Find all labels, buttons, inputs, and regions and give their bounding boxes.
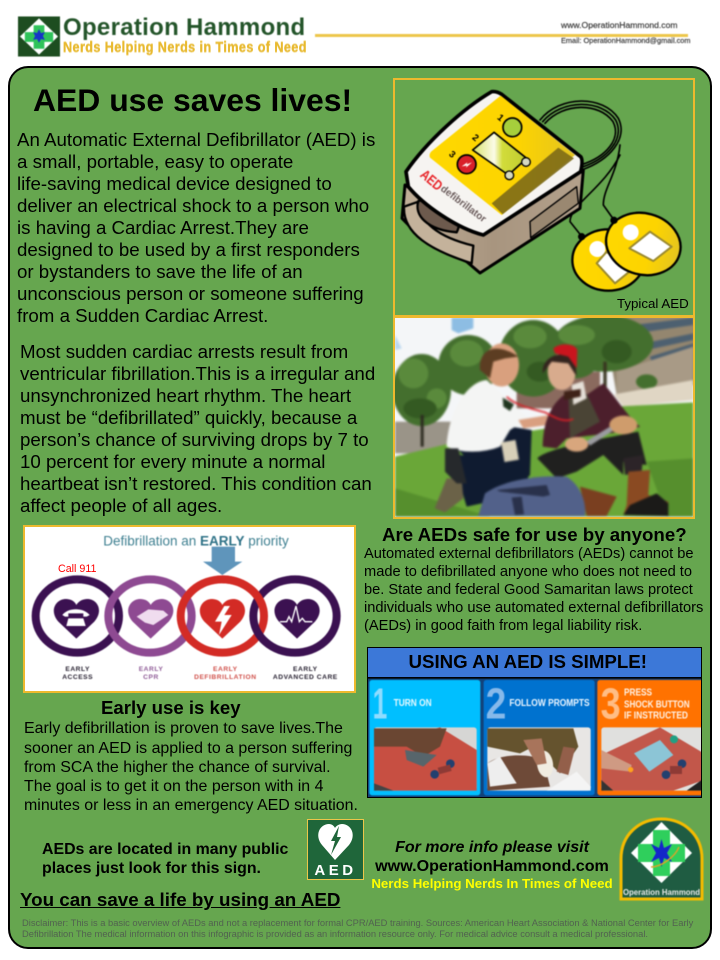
caption: Typical AED — [617, 296, 689, 311]
disclaimer: Defibrillation The medical information on this infographic is provided as an information resource only. For medical advice consult a medical professional. — [22, 929, 648, 939]
panel heading — [368, 648, 701, 679]
AED sign note — [42, 841, 288, 877]
step 1: TURN ON — [394, 698, 432, 709]
intro paragraph: life-saving medical device designed to — [17, 173, 332, 194]
arrow — [203, 547, 242, 575]
intro paragraph — [17, 129, 375, 326]
safety paragraph: made to defibrillated anyone who does not need to — [364, 564, 692, 580]
tagline: Nerds Helping Nerds in Times of Need — [63, 39, 307, 56]
organisation name: Operation Hammond — [63, 14, 305, 41]
intro paragraph: from a Sudden Cardiac Arrest. — [17, 305, 268, 326]
step 1 — [369, 680, 480, 795]
icon: AED sign: AED — [314, 862, 357, 879]
safety paragraph — [364, 546, 703, 634]
header logo — [17, 16, 61, 58]
chain of survival graphic — [30, 533, 342, 681]
safety paragraph: Automated external defibrillators (AEDs) cannot be — [364, 546, 694, 562]
visit line: For more info please visit — [395, 839, 589, 856]
step 3: PRESS — [624, 688, 652, 699]
steps graphic — [368, 678, 701, 797]
heading: are AEDs safe: Are AEDs safe for use by anyone? — [382, 524, 687, 545]
header banner — [17, 14, 691, 58]
step 2 — [484, 680, 595, 795]
chain of survival graphic: EARLY — [293, 666, 318, 673]
early use paragraph: The goal is to get it on the person with in 4 — [24, 778, 323, 794]
panel: using an AED — [367, 647, 702, 798]
panel heading: USING AN AED IS SIMPLE! — [408, 651, 647, 672]
tagline line: Nerds Helping Nerds In Times of Need — [371, 876, 613, 891]
step 2: 2 — [486, 680, 506, 729]
early use paragraph: minutes or less in an emergency AED situation. — [24, 797, 358, 814]
call to save a life: You can save a life by using an AED — [20, 889, 340, 910]
step 3: IF INSTRUCTED — [624, 711, 688, 722]
ventricular fibrillation paragraph: unsynchronized heart rhythm. The heart — [20, 385, 351, 406]
ventricular fibrillation paragraph: affect people of all ages. — [20, 495, 222, 516]
AED sign note: places just look for this sign. — [42, 860, 261, 877]
ventricular fibrillation paragraph: must be “defibrillated” quickly, because a — [20, 407, 357, 428]
AED sign note: AEDs are located in many public — [42, 841, 288, 858]
step 1: 1 — [373, 680, 387, 729]
ventricular fibrillation paragraph: ventricular fibrillation.This is a irregular and — [20, 363, 375, 384]
panel: typical AED illustration — [393, 78, 695, 317]
intro paragraph: is having a Cardiac Arrest.They are — [17, 217, 309, 238]
early use paragraph: Early defibrillation is proven to save lives.The — [24, 720, 343, 737]
chain of survival graphic: DEFIBRILLATION — [194, 674, 257, 681]
safety paragraph: be. State and federal Good Samaritan laws protect — [364, 582, 693, 598]
intro paragraph: deliver an electrical shock to a person who — [17, 195, 369, 216]
chain of survival graphic: EARLY — [213, 666, 238, 673]
photo: paramedic and patient — [393, 316, 695, 519]
ventricular fibrillation paragraph — [20, 341, 375, 516]
disclaimer — [22, 918, 694, 939]
icon: AED device and pads: defibrillator — [438, 184, 488, 225]
ventricular fibrillation paragraph: heartbeat isn’t restored. This condition can — [20, 473, 372, 494]
icon: Operation Hammond badge — [618, 816, 704, 902]
panel: chain of survival — [23, 525, 356, 693]
safety paragraph: individuals who use automated external defibrillators — [364, 600, 703, 616]
icon: AED sign — [307, 819, 364, 880]
chain of survival graphic: EARLY — [139, 666, 163, 673]
icon: AED device and pads: 3 — [447, 149, 457, 160]
ventricular fibrillation paragraph: 10 percent for every minute a normal — [20, 451, 325, 472]
intro paragraph: designed to be used by a first responders — [17, 239, 360, 260]
early use paragraph: sooner an AED is applied to a person suffering — [24, 740, 352, 756]
safety paragraph: (AEDs) in good faith from legal liability risk. — [364, 618, 642, 634]
step 3: SHOCK BUTTON — [624, 699, 690, 710]
icon: AED device and pads: AED — [417, 166, 446, 194]
chain of survival graphic: ACCESS — [62, 674, 93, 681]
chart heading: Defibrillation an EARLY priority — [103, 533, 289, 548]
intro paragraph: An Automatic External Defibrillator (AED) is — [17, 129, 375, 150]
early use paragraph — [24, 720, 358, 814]
ventricular fibrillation paragraph: person’s chance of surviving drops by 7 to — [20, 429, 369, 450]
website: www.OperationHammond.com — [561, 20, 678, 30]
disclaimer: Disclaimer: This is a basic overview of AEDs and not a replacement for formal CPR/AED training. Sources: American Heart Association & National Center for Early — [22, 918, 693, 928]
intro paragraph: unconscious person or someone suffering — [17, 283, 364, 304]
intro paragraph: a small, portable, easy to operate — [17, 151, 293, 172]
icon: AED device and pads — [400, 89, 682, 293]
website line: www.OperationHammond.com — [375, 857, 609, 875]
chain of survival graphic: CPR — [143, 674, 159, 681]
chain of survival graphic: EARLY — [65, 666, 90, 673]
heading: early use is key: Early use is key — [101, 697, 241, 718]
icon: AED device and pads: 2 — [470, 132, 481, 143]
icon: Operation Hammond badge: Operation Hammond — [623, 888, 700, 897]
title: AED use saves lives! — [33, 82, 352, 118]
step 3 — [597, 680, 704, 795]
early use paragraph: from SCA the higher the chance of survival. — [24, 758, 331, 776]
ventricular fibrillation paragraph: Most sudden cardiac arrests result from — [20, 341, 348, 362]
intro paragraph: or bystanders to save the life of an — [17, 261, 303, 282]
icon: AED device and pads: 1 — [495, 112, 506, 123]
email: Email: OperationHammond@gmail.com — [561, 36, 690, 45]
step 3: 3 — [601, 680, 621, 729]
header gold rule — [315, 34, 688, 37]
step 2: FOLLOW PROMPTS — [509, 698, 590, 709]
call to action — [371, 839, 613, 891]
chain of survival graphic: ADVANCED CARE — [273, 674, 338, 681]
call 911 annotation: Call 911 — [58, 563, 96, 575]
